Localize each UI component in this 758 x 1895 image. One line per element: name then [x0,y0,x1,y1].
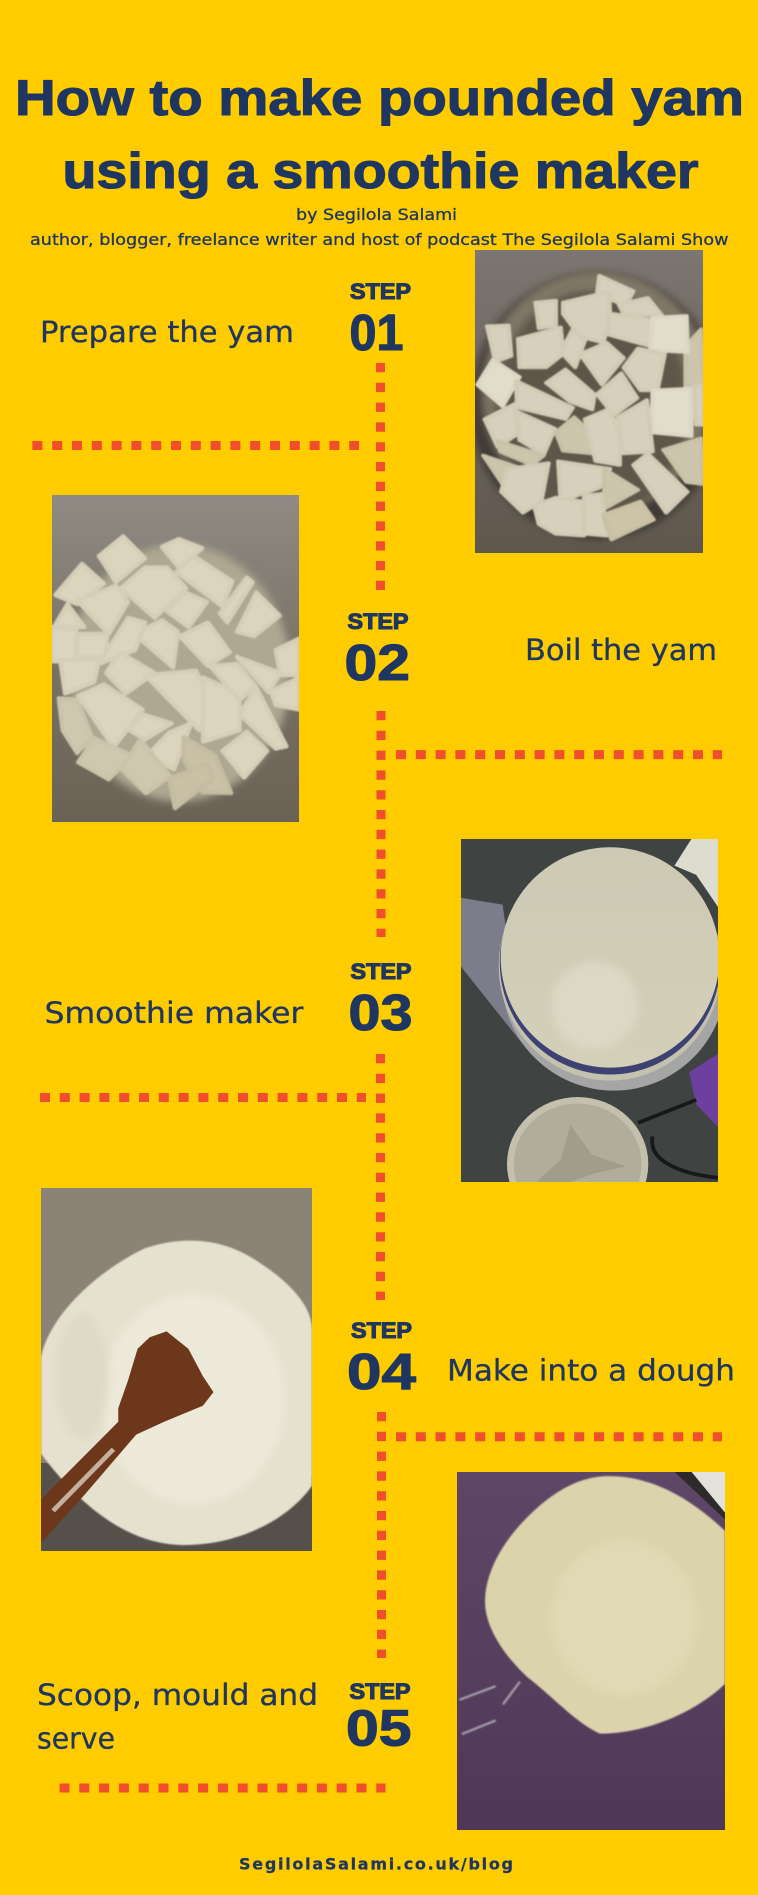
panel: step 5 [37,1472,725,1830]
step 1 label: 01 [350,304,404,361]
step 1 label: STEP [350,279,411,304]
step 2 text: Boil the yam [525,633,717,667]
dotted line: horizontal under step 2 [396,750,722,759]
panel: step 1 [40,250,724,553]
dotted line: vertical segment 2 [376,711,386,937]
photo: moulded pounded yam on purple plate [457,1472,725,1830]
byline: by Segilola Salami [296,205,457,224]
step 5 text: serve [37,1722,115,1756]
wooden spoon [41,1331,213,1540]
step 3 label: STEP [350,959,412,984]
dotted line: vertical segment 3 [376,1054,385,1300]
step 5 text [37,1678,318,1756]
dotted line: horizontal under step 1 [32,441,359,450]
dotted line: vertical segment 1 [376,363,385,590]
step 2 label: 02 [344,634,410,691]
step 3 label [348,959,412,1041]
dotted line: horizontal under step 5 [60,1784,386,1792]
step 5 label [346,1679,412,1756]
step 4 label: 04 [347,1343,417,1400]
step 5 label: 05 [346,1700,412,1756]
step 2 label: STEP [348,609,408,634]
step 4 text: Make into a dough [447,1354,735,1388]
step 5 label: STEP [350,1679,410,1704]
dotted line: horizontal under step 4 [396,1432,722,1441]
step 4 label [347,1318,417,1400]
step 4 label: STEP [351,1318,412,1343]
photo: raw yam cubes in pot [475,250,703,553]
step 1 label [350,279,411,361]
panel: step 3 [44,839,726,1231]
step 2 label [344,609,410,691]
photo: smoothie maker jar [461,839,718,1182]
photo: boiled yam in pot [52,495,299,822]
step 5 text: Scoop, mould and [37,1678,318,1712]
step 3 label: 03 [348,984,412,1041]
dotted line: vertical segment 4 [377,1412,386,1658]
footer url: SegilolaSalami.co.uk/blog [239,1854,513,1874]
dotted line: horizontal under step 3 [40,1093,366,1102]
panel: step 2 [52,495,717,822]
byline: author, blogger, freelance writer and host of podcast The Segilola Salami Show [30,230,728,249]
title: How to make pounded yam [15,70,744,126]
title [15,70,744,199]
step 1 text: Prepare the yam [40,315,294,349]
step 3 text: Smoothie maker [44,996,304,1030]
title: using a smoothie maker [62,143,698,199]
photo: stirring dough with wooden spoon [41,1188,312,1551]
byline [30,205,728,249]
panel: step 4 [41,1188,735,1551]
